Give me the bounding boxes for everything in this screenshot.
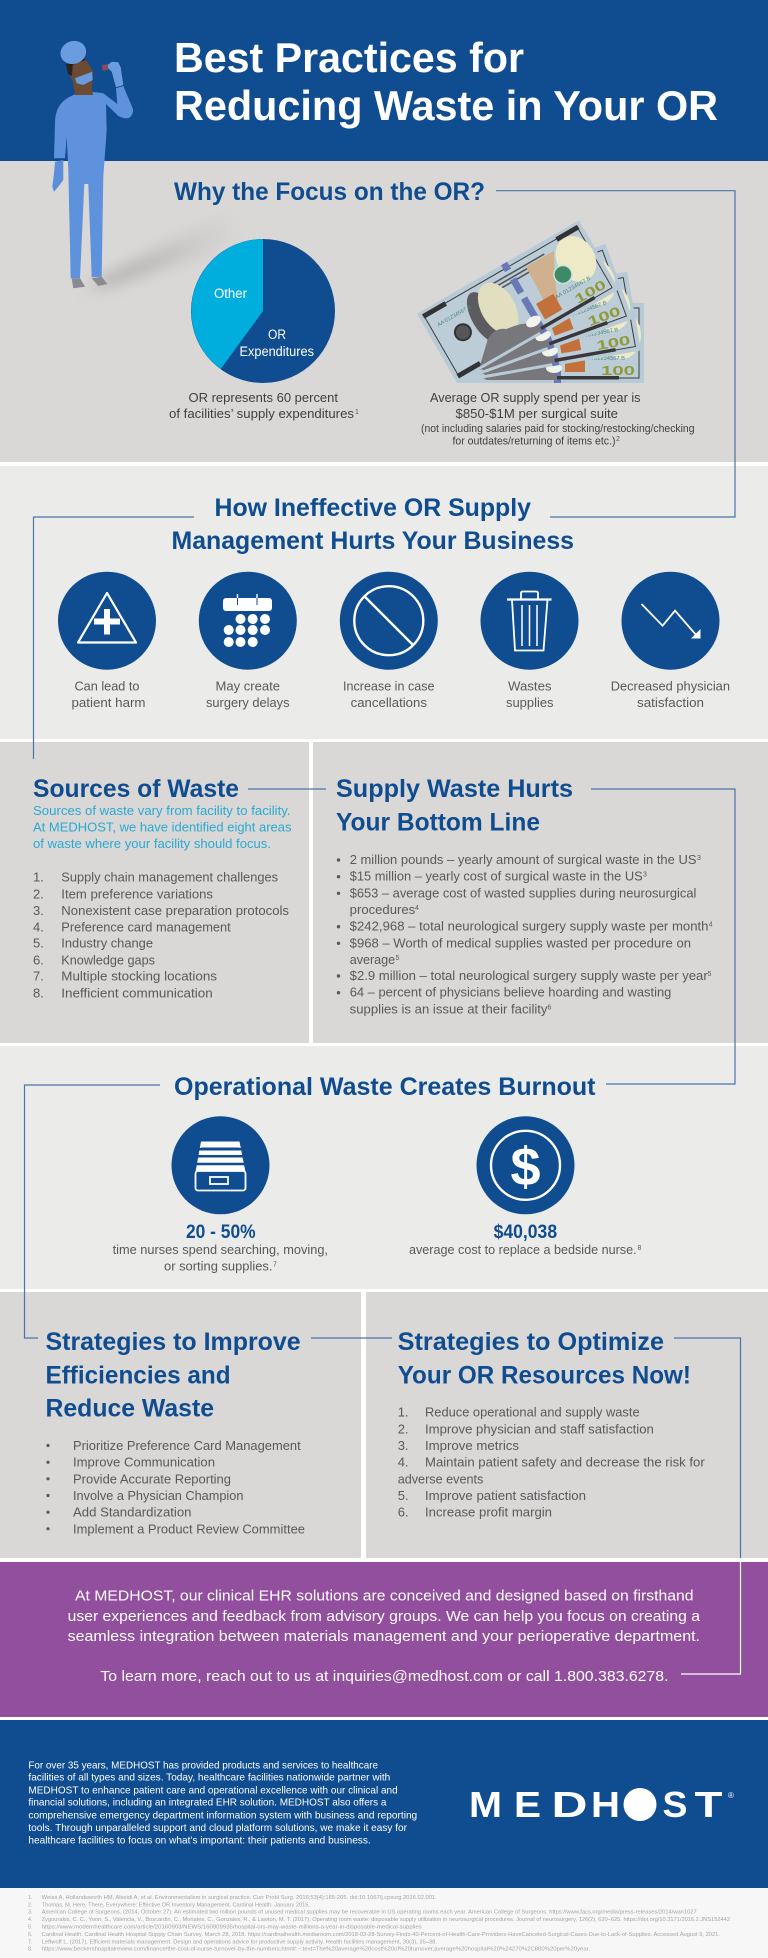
title <box>174 34 718 129</box>
heading: strategies to optimize: Your OR Resources Now! <box>398 1361 691 1389</box>
icon: fanned dollar bills: 100 <box>595 332 631 353</box>
footnotes: Leftwoff L. (2017). Efficient materials management. Design and operations advice for productive supply activity. Health facilities management, 30(3), 35–38. <box>42 1939 437 1945</box>
stat: nurse search time: 7 <box>273 1262 277 1269</box>
numbered list of waste sources: Knowledge gaps <box>61 952 155 967</box>
heading: sources of waste: Sources of Waste <box>33 775 239 803</box>
label: patient harm: patient harm <box>72 695 146 710</box>
panel: strategies to improve efficiencies <box>0 1292 361 1558</box>
footnotes: 6. <box>28 1932 32 1938</box>
numbered list of waste sources: Industry change <box>61 936 153 951</box>
label: patient harm <box>72 679 146 710</box>
intro text <box>33 803 292 851</box>
stat: nurse search time: time nurses spend searching, moving, <box>113 1242 328 1257</box>
call to action text: user experiences and feedback from advisory groups. We can help you focus on creating a <box>68 1608 701 1625</box>
label: physician satisfaction: satisfaction <box>637 695 704 710</box>
bulleted strategies <box>46 1438 305 1536</box>
numbered strategies: adverse events <box>398 1471 484 1486</box>
numbered strategies: 5. <box>398 1488 409 1503</box>
label: wastes supplies <box>506 679 554 710</box>
bulleted strategies: Implement a Product Review Committee <box>73 1521 305 1536</box>
footnotes: Zygourakis, C. C., Yoon, S., Valencia, V., Boscardin, C., Moriates, C., Gonzales, R., & Lawton, M. T. (2017). Operating room waste: disposable supply utilization in neurosurgical procedures. Journal of neurosurgery, 126(2), 620–625. https://doi.org/10.3171/2016.2.JNS152442 <box>42 1917 730 1923</box>
bulleted statistics: 64 – percent of physicians believe hoarding and wasting <box>350 985 671 1000</box>
figure shadow <box>85 208 250 289</box>
icon: fanned dollar bills <box>417 220 644 383</box>
bulleted statistics: 4 <box>709 922 713 929</box>
spend caption: for outdates/returning of items etc.) <box>452 436 616 448</box>
icon: fanned dollar bills: AA 01234567 B <box>568 300 608 319</box>
numbered strategies: 4. <box>398 1455 409 1470</box>
pie chart: Expenditures <box>240 344 314 359</box>
footnotes: 2. <box>28 1902 32 1908</box>
label: physician satisfaction: Decreased physician <box>611 679 730 694</box>
panel: how ineffective supply management hurts <box>0 466 768 739</box>
pie caption: of facilities’ supply expenditures <box>169 406 354 421</box>
bulleted statistics: 4 <box>415 905 419 912</box>
heading: strategies to improve: Strategies to Improve <box>46 1328 301 1356</box>
panel: operational waste creates burnout <box>0 1046 768 1289</box>
numbered list of waste sources: 4. <box>33 919 44 934</box>
footnotes <box>0 1888 768 1958</box>
MEDHOST logo: M <box>469 1784 502 1825</box>
panel: purple call to action <box>0 1562 768 1717</box>
numbered list of waste sources: Supply chain management challenges <box>61 870 278 885</box>
stat: nurse replacement cost: $40,038 <box>494 1222 557 1243</box>
footnotes: https://www.modernhealthcare.com/article/20160903/NEWS/160909935/hospital-ors-may-waste-millions-a-year-in-disposable-medical-supplies <box>42 1924 422 1930</box>
bulleted statistics: 3 <box>697 855 701 862</box>
heading: supply waste: Supply Waste Hurts <box>336 775 573 803</box>
spend caption: (not including salaries paid for stocking/restocking/checking <box>421 423 694 435</box>
bulleted statistics: 5 <box>396 955 400 962</box>
bulleted statistics: $653 – average cost of wasted supplies during neurosurgical <box>350 885 697 900</box>
label: surgery delays: surgery delays <box>206 695 290 710</box>
label: surgery delays: May create <box>216 679 280 694</box>
panel: strategies to optimize resources <box>366 1292 768 1558</box>
icon: fanned dollar bills: 100 <box>601 363 635 378</box>
title: Reducing Waste in Your OR <box>174 82 718 129</box>
pie caption: 1 <box>355 409 359 416</box>
icon: fanned dollar bills: AA 01234567 B <box>578 327 619 340</box>
footnotes: 3. <box>28 1910 32 1916</box>
label: case cancellations: cancellations <box>351 695 428 710</box>
MEDHOST logo: D <box>552 1784 588 1825</box>
connector lines between sections <box>24 191 740 1674</box>
icon: fanned dollar bills: AA 01234567 B <box>554 275 592 301</box>
stat: nurse search time <box>113 1222 328 1274</box>
spend caption: 2 <box>616 436 620 443</box>
icon: patient harm triangle <box>58 572 156 670</box>
icon: fanned dollar bills: AA 01234567 B <box>436 304 473 329</box>
numbered list of waste sources: 6. <box>33 952 44 967</box>
footnotes: 4. <box>28 1917 32 1923</box>
heading: how ineffective: How Ineffective OR Supply <box>214 494 531 522</box>
about text: tools. Through unparalleled support and cloud platform solutions, we make it easy for <box>28 1822 407 1834</box>
icon: prohibited sign <box>340 572 438 670</box>
numbered list of waste sources: 1. <box>33 870 44 885</box>
intro text: of waste where your facility should focus. <box>33 836 271 851</box>
footnotes: https://www.beckershospitalreview.com/finance/the-cost-of-nurse-turnover-by-the-numbers.html#:~:text=The%20average%20cost%20of%20turnover,average%20hospital%20%24270%2C800%20per%20year. <box>42 1947 590 1953</box>
stat: nurse replacement cost: 8 <box>638 1245 642 1252</box>
numbered list of waste sources: 3. <box>33 903 44 918</box>
numbered list of waste sources: 7. <box>33 969 44 984</box>
pie caption: OR represents 60 percent <box>188 390 338 405</box>
spend caption: $850-$1M per surgical suite <box>456 406 618 421</box>
pie caption <box>169 390 359 421</box>
numbered strategies: 1. <box>398 1405 409 1420</box>
intro text: Sources of waste vary from facility to facility. <box>33 803 290 818</box>
call to action text: seamless integration between materials management and your perioperative department. <box>68 1628 700 1645</box>
numbered list of waste sources: Nonexistent case preparation protocols <box>61 903 289 918</box>
heading: how ineffective: Management Hurts Your Business <box>172 527 574 555</box>
about text: facilities of all types and sizes. Today, healthcare facilities nationwide partner with <box>28 1772 390 1784</box>
numbered list of waste sources: Multiple stocking locations <box>61 969 218 984</box>
bulleted strategies: Involve a Physician Champion <box>73 1488 243 1503</box>
bulleted statistics: $968 – Worth of medical supplies wasted per procedure on <box>350 935 691 950</box>
bulleted statistics: $242,968 – total neurological surgery supply waste per month <box>350 919 708 934</box>
heading: supply waste <box>336 775 573 837</box>
footnotes: 5. <box>28 1924 32 1930</box>
icon: dollar coin: $ <box>510 1137 541 1197</box>
stat: nurse replacement cost: average cost to replace a bedside nurse. <box>409 1242 637 1257</box>
pie chart: OR <box>268 327 286 342</box>
numbered list of waste sources: 5. <box>33 936 44 951</box>
icon: file drawer <box>172 1116 270 1214</box>
icon: fanned dollar bills: 100 <box>572 277 609 307</box>
heading: supply waste: Your Bottom Line <box>336 809 540 837</box>
about text <box>28 1759 417 1846</box>
numbered strategies: 6. <box>398 1505 409 1520</box>
bulleted statistics: $2.9 million – total neurological surgery supply waste per year <box>350 968 708 983</box>
stat: nurse search time: 20 - 50% <box>186 1222 256 1243</box>
about text: healthcare facilities to focus on what’s important: their patients and business. <box>28 1834 371 1846</box>
footnotes: Cardinal Health. Cardinal Health Hospital Supply Chain Survey. March 28, 2018. https://cardinalhealth.mediaroom.com/2018-03-28-Survey-Finds-40-Percent-of-Health-Care-Providers-HaveCanceled-Surgical-Cases-Due-to-Lack-of-Supplies. Accessed August 9, 2021. <box>42 1932 720 1938</box>
about text: MEDHOST to enhance patient care and operational excellence with our clinical and <box>28 1784 398 1796</box>
heading: why the focus: Why the Focus on the OR? <box>174 178 485 206</box>
label: wastes supplies: Wastes <box>508 679 552 694</box>
numbered strategies: 2. <box>398 1421 409 1436</box>
label: physician satisfaction <box>611 679 730 710</box>
pie chart <box>191 239 335 383</box>
bulleted statistics: 6 <box>548 1004 552 1011</box>
title: Best Practices for <box>174 34 524 81</box>
MEDHOST logo <box>469 1784 734 1825</box>
MEDHOST logo: T <box>694 1784 722 1825</box>
numbered list of waste sources: Item preference variations <box>61 886 214 901</box>
spend caption <box>421 390 694 448</box>
about text: financial solutions, including an integrated EHR solution. MEDHOST also offers a <box>28 1797 387 1809</box>
pie chart: Other <box>214 286 247 301</box>
MEDHOST logo: S <box>662 1784 688 1825</box>
icon: fanned dollar bills: AA 01234567 B <box>585 356 625 362</box>
numbered strategies: Improve physician and staff satisfaction <box>425 1421 654 1436</box>
numbered strategies <box>398 1405 705 1520</box>
label: case cancellations: Increase in case <box>343 679 434 694</box>
bulleted strategies: Prioritize Preference Card Management <box>73 1438 301 1453</box>
heading: strategies to improve <box>46 1328 301 1423</box>
label: patient harm: Can lead to <box>74 679 140 694</box>
numbered list of waste sources: 2. <box>33 886 44 901</box>
panel: about MEDHOST <box>0 1720 768 1888</box>
MEDHOST logo: H <box>591 1784 620 1825</box>
bulleted statistics: average <box>350 952 395 967</box>
panel: why the focus on the OR <box>0 161 768 462</box>
label: case cancellations <box>343 679 434 710</box>
bulleted statistics: 5 <box>708 971 712 978</box>
bulleted statistics: procedures <box>350 902 416 917</box>
MEDHOST logo: E <box>514 1784 541 1825</box>
footnotes: American College of Surgeons. (2014, October 27). An estimated two million pounds of unused medical supplies may be recoverable in US operating rooms each year. American College of Surgeons. https://www.facs.org/media/press-releases/2014/wan1027 <box>42 1910 697 1916</box>
heading: strategies to optimize: Strategies to Optimize <box>398 1328 664 1356</box>
panel: sources of waste <box>0 742 309 1043</box>
heading: strategies to improve: Reduce Waste <box>46 1395 214 1423</box>
MEDHOST logo: ® <box>728 1791 734 1800</box>
footnotes: 1. <box>28 1895 32 1901</box>
call to action text <box>68 1588 701 1685</box>
numbered list of waste sources <box>33 870 289 1000</box>
illustration: surgeon figure <box>52 37 133 288</box>
about text: comprehensive emergency department information system with business and reporting <box>28 1809 417 1821</box>
icon: dollar coin <box>476 1116 574 1214</box>
spend caption: Average OR supply spend per year is <box>430 390 641 405</box>
stat: nurse replacement cost <box>409 1222 642 1257</box>
numbered strategies: Maintain patient safety and decrease the risk for <box>425 1455 705 1470</box>
numbered strategies: Improve metrics <box>425 1438 519 1453</box>
heading: how ineffective <box>172 494 574 555</box>
numbered strategies: 3. <box>398 1438 409 1453</box>
numbered strategies: Reduce operational and supply waste <box>425 1405 640 1420</box>
bulleted statistics: 2 million pounds – yearly amount of surgical waste in the US <box>350 852 697 867</box>
numbered list of waste sources: Inefficient communication <box>61 985 213 1000</box>
icon: calendar <box>199 572 297 670</box>
bulleted strategies: Improve Communication <box>73 1455 215 1470</box>
bulleted strategies: Add Standardization <box>73 1505 192 1520</box>
stat: nurse search time: or sorting supplies. <box>164 1259 272 1274</box>
numbered strategies: Increase profit margin <box>425 1505 552 1520</box>
heading: operational waste: Operational Waste Creates Burnout <box>174 1073 596 1101</box>
heading: strategies to improve: Efficiencies and <box>46 1361 231 1389</box>
footnotes: 7. <box>28 1939 32 1945</box>
icon: declining arrow <box>622 572 720 670</box>
icon: trash can <box>480 572 578 670</box>
numbered list of waste sources: Preference card management <box>61 919 231 934</box>
icon: fanned dollar bills: 100 <box>585 303 623 329</box>
call to action text: To learn more, reach out to us at inquiries@medhost.com or call 1.800.383.6278. <box>100 1668 668 1685</box>
header banner <box>0 0 768 161</box>
numbered list of waste sources: 8. <box>33 985 44 1000</box>
bulleted statistics: 3 <box>643 872 647 879</box>
about text: For over 35 years, MEDHOST has provided products and services to healthcare <box>28 1759 378 1771</box>
label: wastes supplies: supplies <box>506 695 554 710</box>
heading: strategies to optimize <box>398 1328 691 1389</box>
intro text: At MEDHOST, we have identified eight areas <box>33 820 292 835</box>
footnotes: Thomas, M. Here, There, Everywhere: Effective OR Inventory Management. Cardinal Health. January 2015. <box>42 1902 310 1908</box>
footnotes: 8. <box>28 1947 32 1953</box>
call to action text: At MEDHOST, our clinical EHR solutions are conceived and designed based on firsthand <box>75 1588 694 1605</box>
bulleted statistics <box>337 852 713 1016</box>
label: surgery delays <box>206 679 290 710</box>
bulleted statistics: $15 million – yearly cost of surgical waste in the US <box>350 869 643 884</box>
bulleted statistics: supplies is an issue at their facility <box>350 1001 548 1016</box>
bulleted strategies: Provide Accurate Reporting <box>73 1471 231 1486</box>
footnotes: Weiss A, Hollandsworth HM, Alseidi A, et al. Environmentalism in surgical practice. Curr Probl Surg. 2016;53(4):165-205. doi:10.1067/j.cpsurg.2016.02.001. <box>42 1895 437 1901</box>
numbered strategies: Improve patient satisfaction <box>425 1488 586 1503</box>
panel: supply waste hurts your bottom line <box>313 742 768 1043</box>
